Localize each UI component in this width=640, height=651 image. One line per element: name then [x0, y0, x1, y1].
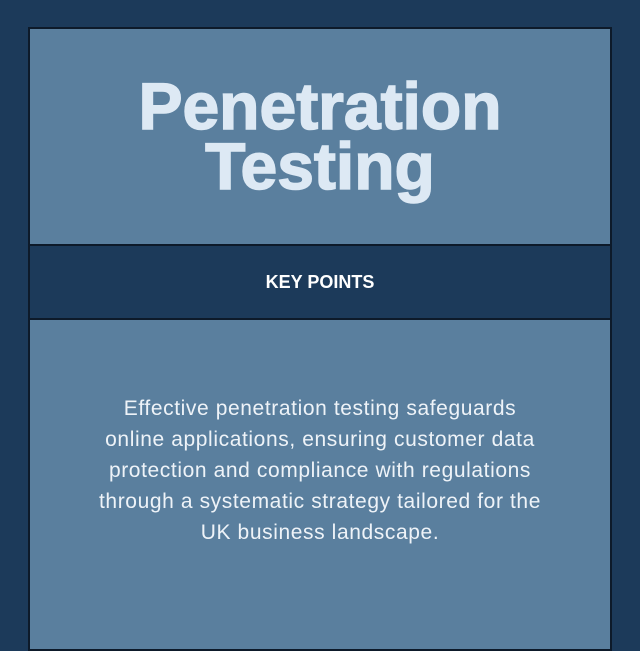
body text [99, 397, 541, 544]
body text: online applications, ensuring customer data [105, 428, 535, 451]
body text: through a systematic strategy tailored for the [99, 490, 541, 513]
body text: protection and compliance with regulations [109, 459, 531, 482]
body text: Effective penetration testing safeguards [124, 397, 516, 420]
body text: UK business landscape. [201, 521, 439, 544]
key points band [30, 244, 610, 320]
title: Penetration [138, 68, 502, 142]
key points band: KEY POINTS [266, 272, 374, 292]
title [138, 68, 502, 204]
title: Testing [205, 128, 435, 202]
